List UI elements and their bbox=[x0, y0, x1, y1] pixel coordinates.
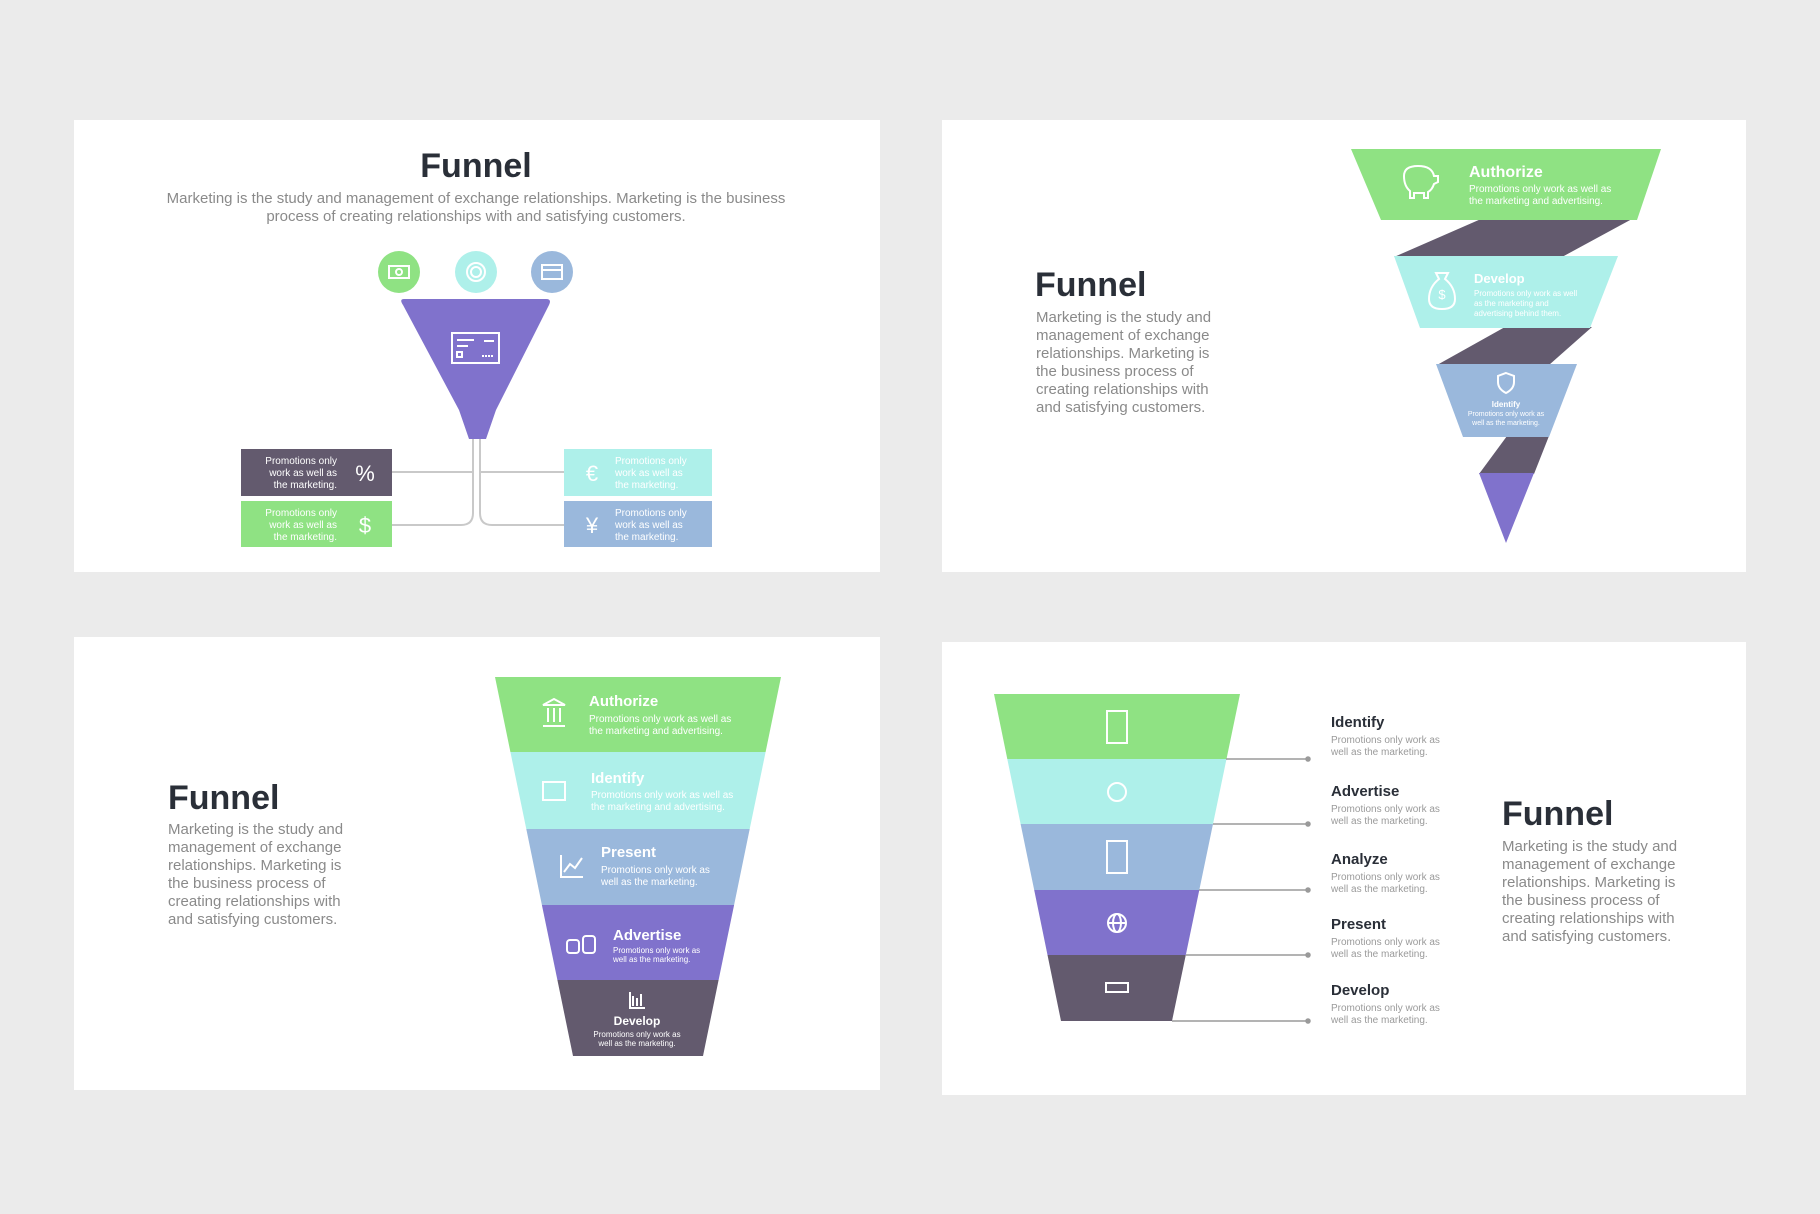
band: Identify: Identify bbox=[591, 770, 645, 787]
box: green dollar: Promotions only bbox=[265, 508, 337, 519]
labels: well as the marketing. bbox=[1330, 884, 1428, 895]
stage: Develop: Develop bbox=[1474, 271, 1525, 286]
labels: Develop bbox=[1331, 982, 1389, 999]
box: blue yen bbox=[564, 501, 712, 547]
labels: Promotions only work as bbox=[1331, 937, 1440, 948]
description: relationships. Marketing is bbox=[1502, 874, 1675, 891]
labels: well as the marketing. bbox=[1330, 816, 1428, 827]
description: and satisfying customers. bbox=[1036, 399, 1205, 416]
panel: bottom-left stacked funnel bbox=[74, 637, 880, 1090]
description: the business process of bbox=[1036, 363, 1194, 380]
stage: Identify bbox=[1436, 364, 1577, 437]
stage: Authorize: Authorize bbox=[1469, 164, 1543, 181]
labels: Promotions only work as bbox=[1331, 735, 1440, 746]
band: Identify bbox=[510, 752, 766, 829]
box: blue yen: work as well as bbox=[614, 520, 683, 531]
description: Marketing is the study and bbox=[168, 821, 343, 838]
stage: Authorize: Promotions only work as well as bbox=[1469, 184, 1611, 195]
box: cyan euro: € bbox=[586, 461, 598, 486]
description: creating relationships with bbox=[1036, 381, 1209, 398]
icons bbox=[1106, 711, 1128, 992]
description bbox=[1502, 838, 1677, 945]
title: Funnel bbox=[1502, 795, 1613, 833]
labels: well as the marketing. bbox=[1330, 1015, 1428, 1026]
band: Advertise: Promotions only work as bbox=[613, 946, 700, 955]
stage: Develop: advertising behind them. bbox=[1474, 309, 1561, 318]
band: Present: Promotions only work as bbox=[601, 865, 710, 876]
stage: Identify: Identify bbox=[1492, 400, 1521, 409]
title: Funnel bbox=[168, 779, 279, 817]
labels: Analyze bbox=[1331, 851, 1388, 868]
box: cyan euro: the marketing. bbox=[615, 480, 678, 491]
stage: Authorize: the marketing and advertising. bbox=[1469, 196, 1603, 207]
stage: Develop: Promotions only work as well bbox=[1474, 289, 1577, 298]
band: Develop: Develop bbox=[614, 1014, 660, 1028]
box: dark percent: % bbox=[355, 461, 375, 486]
description: relationships. Marketing is bbox=[168, 857, 341, 874]
band: Authorize: Authorize bbox=[589, 693, 658, 710]
description: management of exchange bbox=[1036, 327, 1209, 344]
band: Advertise bbox=[542, 905, 734, 980]
band: Develop: Promotions only work as bbox=[593, 1030, 681, 1039]
description: process of creating relationships with and satisfying customers. bbox=[266, 208, 686, 225]
box: dark percent: the marketing. bbox=[274, 480, 337, 491]
description: and satisfying customers. bbox=[168, 911, 337, 928]
box: green dollar bbox=[241, 501, 392, 547]
icon: card circle bbox=[531, 251, 573, 293]
labels: Promotions only work as bbox=[1331, 804, 1440, 815]
connector lines bbox=[392, 439, 564, 525]
band: Identify: the marketing and advertising. bbox=[591, 802, 725, 813]
box: green dollar: $ bbox=[359, 513, 371, 538]
labels: Promotions only work as bbox=[1331, 1003, 1440, 1014]
box: cyan euro bbox=[564, 449, 712, 496]
leader lines bbox=[1172, 757, 1310, 1023]
labels bbox=[1330, 714, 1440, 1026]
description bbox=[167, 190, 785, 225]
labels: Identify bbox=[1331, 714, 1385, 731]
band: Develop: well as the marketing. bbox=[597, 1039, 676, 1048]
description bbox=[1036, 309, 1211, 416]
band: Present: well as the marketing. bbox=[600, 877, 698, 888]
description: Marketing is the study and bbox=[1502, 838, 1677, 855]
box: blue yen: the marketing. bbox=[615, 532, 678, 543]
stage: Identify: well as the marketing. bbox=[1471, 420, 1540, 427]
stage: Authorize bbox=[1351, 149, 1661, 220]
description: creating relationships with bbox=[168, 893, 341, 910]
band: Authorize bbox=[495, 677, 781, 752]
tip triangle bbox=[1479, 473, 1534, 543]
description: management of exchange bbox=[168, 839, 341, 856]
title: Funnel bbox=[1035, 266, 1146, 304]
description: and satisfying customers. bbox=[1502, 928, 1671, 945]
stage: Identify: Promotions only work as bbox=[1468, 411, 1545, 418]
band: Authorize: the marketing and advertising. bbox=[589, 726, 723, 737]
stage: Develop: $ bbox=[1438, 287, 1446, 302]
description bbox=[168, 821, 343, 928]
bands bbox=[994, 694, 1240, 1021]
box: blue yen: Promotions only bbox=[615, 508, 687, 519]
description: the business process of bbox=[1502, 892, 1660, 909]
box: dark percent: Promotions only bbox=[265, 456, 337, 467]
description: relationships. Marketing is bbox=[1036, 345, 1209, 362]
box: dark percent bbox=[241, 449, 392, 496]
labels: well as the marketing. bbox=[1330, 949, 1428, 960]
stage: Develop: as the marketing and bbox=[1474, 299, 1549, 308]
box: green dollar: work as well as bbox=[268, 520, 337, 531]
box: blue yen: ¥ bbox=[585, 513, 599, 538]
description: creating relationships with bbox=[1502, 910, 1675, 927]
band: Develop bbox=[557, 980, 719, 1056]
box: cyan euro: Promotions only bbox=[615, 456, 687, 467]
stage: Develop bbox=[1394, 256, 1618, 328]
band: Present bbox=[526, 829, 750, 905]
description: the business process of bbox=[168, 875, 326, 892]
labels: Advertise bbox=[1331, 783, 1399, 800]
title: Funnel bbox=[420, 147, 532, 185]
icon: money circle bbox=[378, 251, 420, 293]
band: Advertise: Advertise bbox=[613, 927, 681, 944]
description: management of exchange bbox=[1502, 856, 1675, 873]
panel: top-right zigzag funnel bbox=[942, 120, 1746, 572]
band: Authorize: Promotions only work as well as bbox=[589, 714, 731, 725]
description: Marketing is the study and management of exchange relationships. Marketing is the business bbox=[167, 190, 785, 207]
panel: bottom-right funnel with labels bbox=[942, 642, 1746, 1095]
box: green dollar: the marketing. bbox=[274, 532, 337, 543]
box: dark percent: work as well as bbox=[268, 468, 337, 479]
dark connector bands bbox=[1394, 219, 1632, 474]
panel: top-left funnel bbox=[74, 120, 880, 572]
labels: well as the marketing. bbox=[1330, 747, 1428, 758]
labels: Present bbox=[1331, 916, 1386, 933]
box: cyan euro: work as well as bbox=[614, 468, 683, 479]
band: Present: Present bbox=[601, 844, 656, 861]
band: Identify: Promotions only work as well as bbox=[591, 790, 733, 801]
band: Advertise: well as the marketing. bbox=[612, 955, 690, 964]
icon: coin circle bbox=[455, 251, 497, 293]
description: Marketing is the study and bbox=[1036, 309, 1211, 326]
labels: Promotions only work as bbox=[1331, 872, 1440, 883]
funnel shape bbox=[401, 299, 550, 439]
